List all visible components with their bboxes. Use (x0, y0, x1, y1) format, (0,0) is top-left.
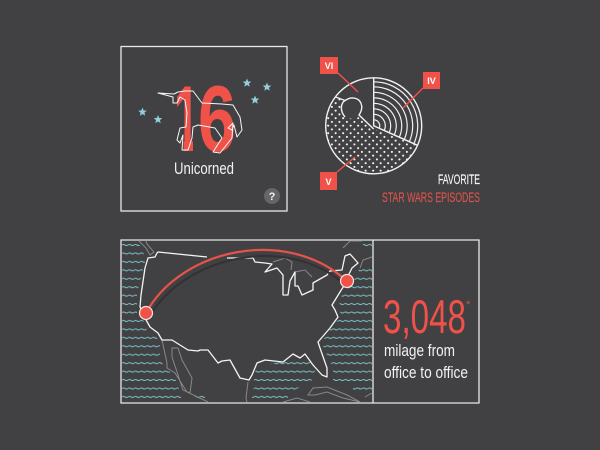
icon: help button: ? (269, 191, 276, 203)
flight arc shadow (150, 256, 344, 316)
icon: unicorn (158, 91, 242, 153)
stars (138, 78, 271, 123)
caption: milage from (384, 341, 455, 360)
panel frame (121, 240, 479, 403)
caption (384, 341, 468, 382)
panel: map (121, 240, 479, 403)
heading: favorite star wars episodes (382, 172, 480, 205)
stat: 3,048: 3,048 (383, 290, 466, 343)
number 16: 6 (198, 66, 236, 171)
asterisk: * (466, 299, 471, 311)
number 16 (177, 86, 234, 152)
label VI: VI (325, 61, 333, 71)
label V: V (325, 177, 332, 187)
marker: west office (140, 306, 152, 320)
marker: east office (340, 274, 354, 288)
label: unicorned: Unicorned (174, 160, 234, 178)
slice IV rings (374, 82, 418, 144)
heading: favorite star wars episodes: FAVORITE (438, 172, 480, 187)
slice V dots (326, 97, 418, 174)
chart: star wars pie (320, 57, 440, 190)
usa outline (140, 252, 358, 380)
label IV: IV (427, 76, 436, 86)
caption: office to office (384, 363, 468, 382)
heading: favorite star wars episodes: STAR WARS EPISODES (382, 190, 480, 205)
flight arc (146, 250, 347, 313)
panel: unicorned (121, 46, 287, 211)
water lines (122, 241, 372, 402)
neighbouring land outlines (139, 241, 372, 402)
icon: help button (264, 188, 280, 204)
number 16: 1 (174, 66, 199, 171)
pie outline (326, 78, 422, 174)
